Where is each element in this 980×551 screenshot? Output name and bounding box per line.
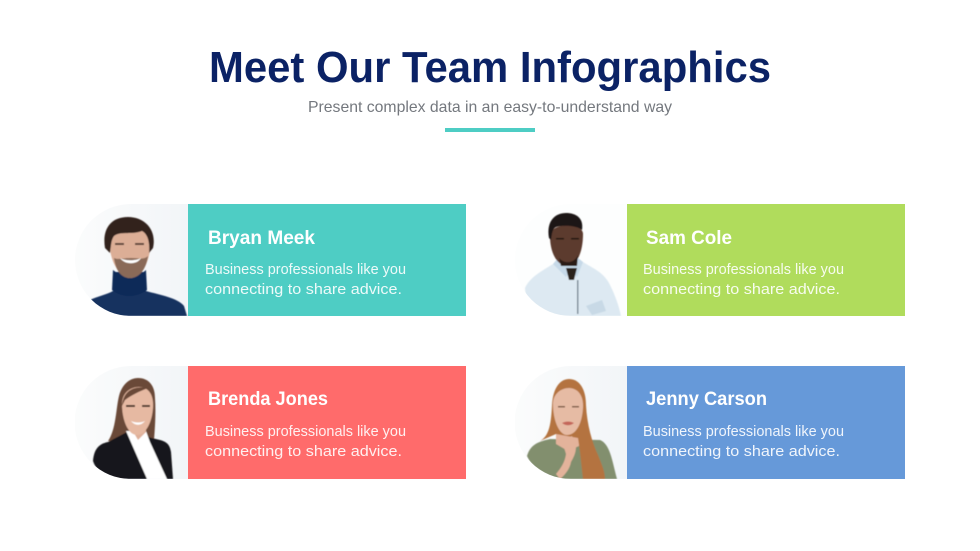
panel: Bryan Meek: [75, 204, 466, 316]
description: Brenda Jones: connecting to share advice.: [205, 443, 402, 460]
name: Jenny Carson: Jenny Carson: [646, 389, 767, 410]
description: Jenny Carson: Business professionals like you: [643, 423, 844, 440]
portrait: Sam Cole: [524, 212, 622, 316]
description: Bryan Meek: connecting to share advice.: [205, 281, 402, 298]
description: Sam Cole: Business professionals like you: [643, 261, 844, 278]
panel: Jenny Carson: [515, 366, 905, 479]
description: Sam Cole: [643, 261, 844, 298]
title underline accent: [445, 128, 535, 132]
portrait: Bryan Meek: [90, 204, 188, 316]
description: Jenny Carson: connecting to share advice.: [643, 443, 840, 460]
card: Bryan Meek: [188, 204, 466, 316]
subtitle: Present complex data in an easy-to-understand way: [308, 99, 672, 116]
description: Jenny Carson: [643, 423, 844, 460]
portrait: Jenny Carson: [515, 366, 627, 479]
description: Brenda Jones: [205, 423, 406, 460]
card: Brenda Jones: [188, 366, 466, 479]
description: Bryan Meek: Business professionals like you: [205, 261, 406, 278]
card: Sam Cole: [627, 204, 905, 316]
name: Bryan Meek: Bryan Meek: [208, 228, 315, 249]
title: Meet Our Team Infographics: [209, 43, 771, 92]
description: Sam Cole: connecting to share advice.: [643, 281, 840, 298]
portrait: Brenda Jones: [92, 366, 188, 479]
description: Bryan Meek: [205, 261, 406, 298]
name: Sam Cole: Sam Cole: [646, 228, 732, 249]
name: Brenda Jones: Brenda Jones: [208, 389, 328, 410]
panel: Brenda Jones: [75, 366, 466, 479]
panel: Sam Cole: [515, 204, 905, 316]
description: Brenda Jones: Business professionals like you: [205, 423, 406, 440]
card: Jenny Carson: [627, 366, 905, 479]
